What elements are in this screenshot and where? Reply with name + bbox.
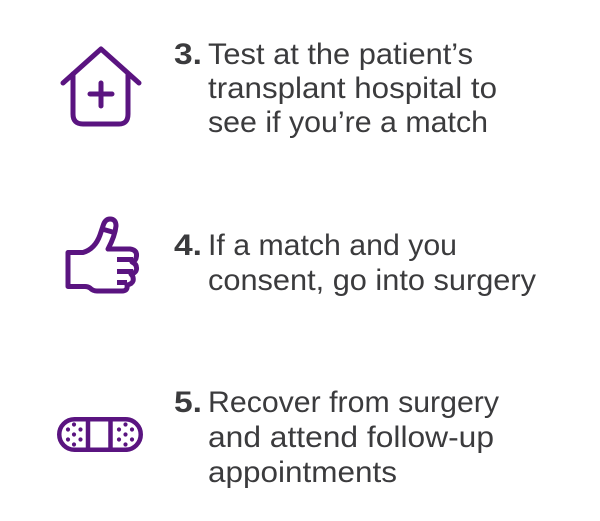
step 4 text: 4.	[174, 229, 202, 262]
step 3 text: transplant hospital to	[208, 72, 497, 105]
step 3 text: 3.	[174, 38, 202, 71]
icon: house with plus	[63, 49, 139, 124]
step 4 text	[174, 229, 536, 297]
step 5 text: appointments	[208, 456, 397, 489]
step 3 text: see if you’re a match	[208, 106, 488, 139]
step 5 text: and attend follow-up	[208, 421, 494, 454]
step 4 text: consent, go into surgery	[208, 264, 536, 297]
icon: bandage	[59, 418, 141, 451]
step 3 text	[174, 38, 497, 139]
step 5 text: Recover from surgery	[208, 386, 499, 419]
step 3 text: Test at the patient’s	[208, 38, 473, 71]
step 4 text: If a match and you	[208, 229, 457, 262]
icon: thumbs up	[68, 219, 137, 291]
step 5 text	[174, 386, 499, 489]
step 5 text: 5.	[174, 386, 202, 419]
